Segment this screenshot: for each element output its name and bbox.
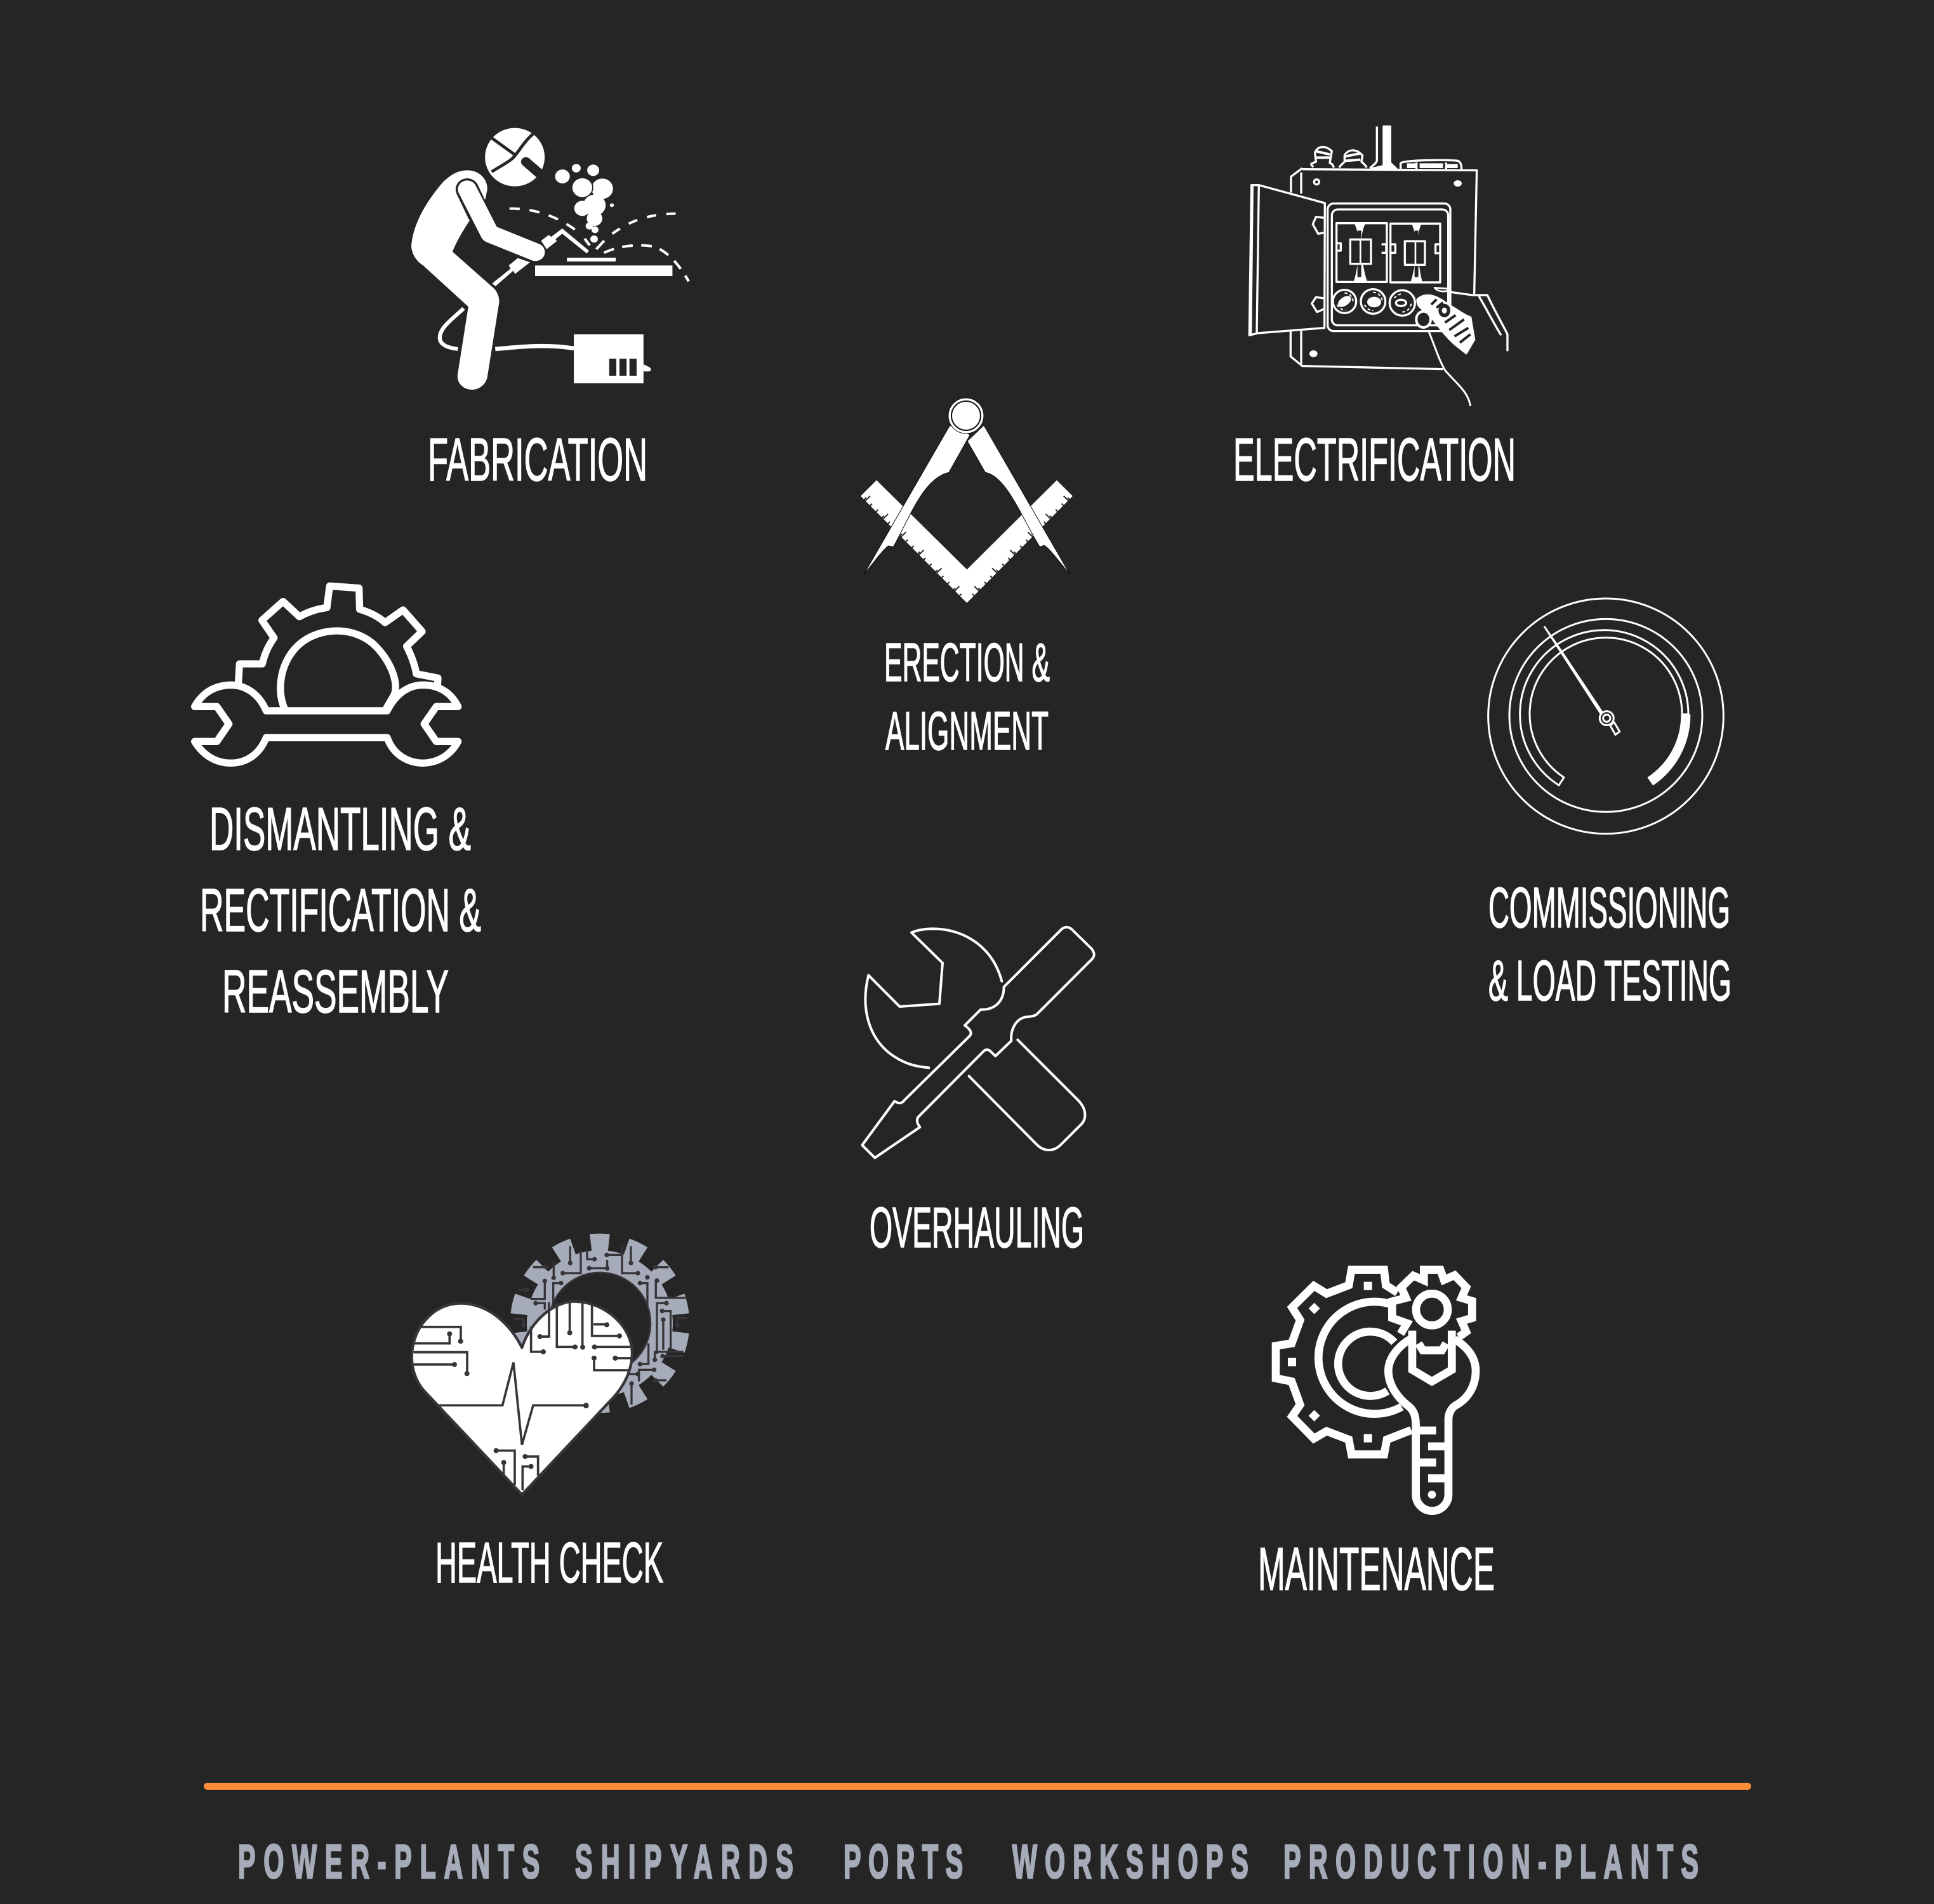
label: maintenance: MAINTENANCE — [1258, 1535, 1495, 1603]
label: erection and alignment — [884, 633, 1050, 762]
footer sectors: SHIPYARDS — [575, 1835, 793, 1888]
orange divider — [204, 1783, 1751, 1790]
icon: wrench and screwdriver — [862, 927, 1094, 1158]
label: fabrication: FABRICATION — [428, 426, 647, 494]
label: commissioning and load testing — [1488, 876, 1732, 1013]
footer sectors: WORKSHOPS — [1012, 1835, 1248, 1888]
label: health check: HEALTH CHECK — [435, 1531, 663, 1595]
label: overhauling: OVERHAULING — [870, 1196, 1084, 1260]
icon: welder — [411, 128, 689, 390]
label: erection and alignment: ALIGNMENT — [885, 701, 1049, 762]
label: electrification: ELECTRIFICATION — [1233, 426, 1516, 494]
footer sectors: POWER-PLANTS — [238, 1835, 540, 1888]
label: dismantling, rectification, reassembly — [200, 795, 481, 1026]
footer sectors — [238, 1835, 1699, 1888]
label: dismantling, rectification, reassembly: RECTIFICATION & — [200, 876, 481, 944]
icon: gear and wrench — [195, 586, 458, 763]
label: erection and alignment: ERECTION & — [884, 633, 1050, 693]
label: dismantling, rectification, reassembly: DISMANTLING & — [209, 795, 471, 863]
label: dismantling, rectification, reassembly: REASSEMBLY — [222, 958, 449, 1026]
icon: gauge — [1488, 598, 1723, 834]
footer sectors: PRODUCTION-PLANTS — [1283, 1835, 1699, 1888]
icon: gears and spanner — [1276, 1270, 1476, 1511]
icon: compass and square — [861, 398, 1073, 603]
icon: electrical panel with hand — [1249, 126, 1507, 406]
footer sectors: PORTS — [844, 1835, 963, 1888]
icon: heart and circuit gear — [412, 1242, 687, 1495]
